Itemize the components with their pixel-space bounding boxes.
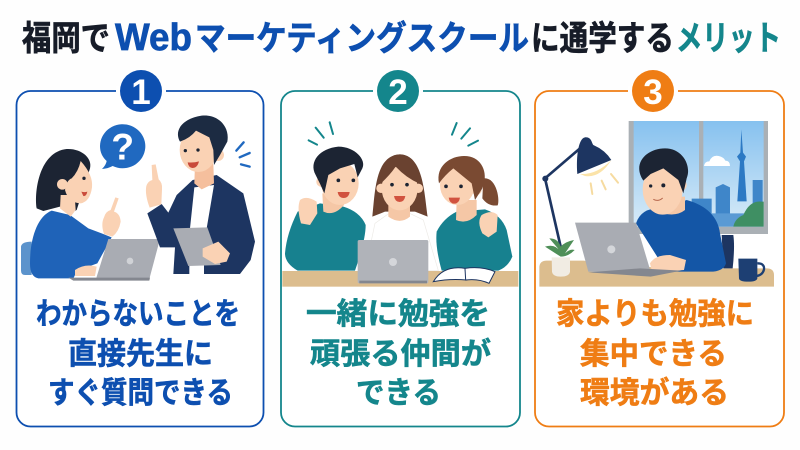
mug	[738, 259, 764, 282]
caption 3	[556, 298, 754, 410]
icon: left ticks	[309, 122, 333, 145]
student	[636, 148, 734, 272]
caption 1: 直接先生に	[68, 338, 213, 371]
title: Web	[115, 17, 192, 59]
potted plant	[545, 238, 575, 277]
laptop	[575, 223, 682, 277]
illustration: three study friends at a laptop	[282, 122, 518, 287]
badge: number 2: 2	[388, 73, 408, 112]
caption 3: 集中できる	[580, 338, 727, 371]
laptop	[358, 240, 428, 283]
badge: number 2	[377, 70, 419, 112]
right woman	[436, 156, 512, 271]
left man	[285, 147, 366, 271]
caption 3: 環境がある	[580, 376, 729, 410]
desk lamp	[542, 137, 618, 247]
illustration: man studying at a laptop by a window	[539, 121, 774, 287]
caption 2	[306, 298, 491, 410]
caption 1: わからないことを	[36, 298, 240, 331]
title: に通学する	[531, 20, 674, 58]
teacher	[146, 116, 255, 274]
middle woman	[365, 154, 438, 271]
caption 3: 家よりも勉強に	[556, 298, 754, 331]
panel: merit 2	[281, 70, 520, 426]
caption 1: すぐ質問できる	[48, 377, 233, 410]
panel: merit 3	[535, 70, 784, 426]
icon: emphasis ticks	[236, 142, 250, 167]
icon: question speech bubble	[100, 124, 145, 169]
laptop	[68, 239, 160, 281]
open book	[433, 268, 495, 283]
caption 1	[36, 298, 240, 410]
illustration: woman asking the teacher a question	[21, 116, 255, 281]
window with city view	[629, 121, 768, 234]
title	[22, 17, 781, 59]
badge: number 1: 1	[131, 73, 151, 112]
title: マーケティングスクール	[195, 20, 529, 58]
caption 2: 頑張る仲間が	[310, 337, 491, 371]
desk	[539, 261, 774, 287]
caption 2: 一緒に勉強を	[306, 298, 490, 331]
badge: number 3: 3	[643, 73, 663, 112]
caption 2: できる	[356, 377, 441, 410]
badge: number 3	[632, 70, 674, 112]
icon: question speech bubble: ?	[111, 125, 134, 167]
table	[282, 271, 518, 287]
icon: right ticks	[452, 123, 478, 146]
badge: number 1	[120, 70, 162, 112]
title: 福岡で	[22, 20, 110, 58]
woman	[30, 149, 121, 278]
panel: merit 1	[16, 70, 264, 426]
